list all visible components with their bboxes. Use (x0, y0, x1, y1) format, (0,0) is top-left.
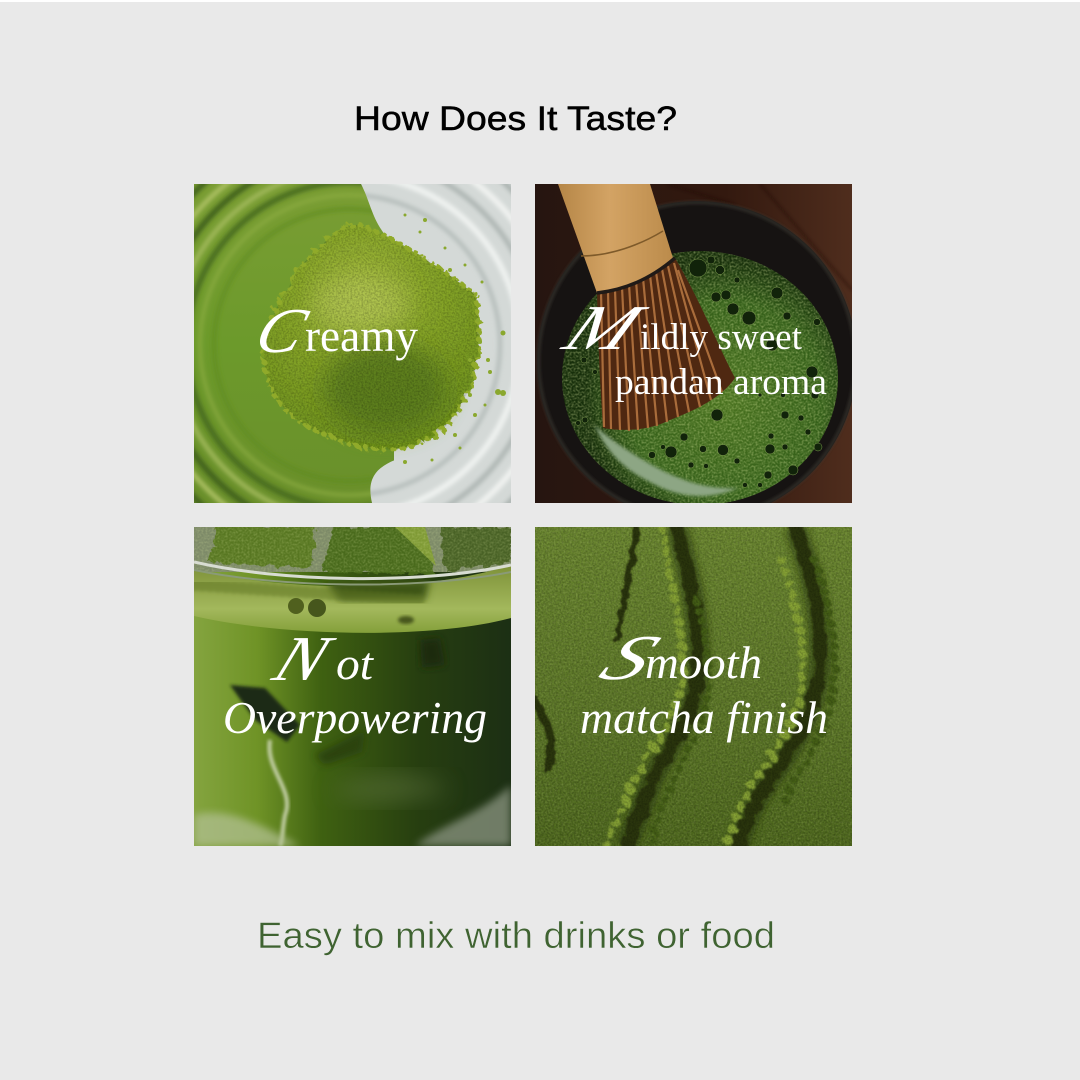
label: mildly sweet pandan aroma: pandan aroma (615, 362, 827, 403)
leaf (594, 425, 738, 496)
label: not overpowering (223, 624, 487, 743)
bubbles (576, 256, 822, 488)
label: mildly sweet pandan aroma (551, 292, 827, 403)
panel: smooth matcha finish (535, 527, 852, 846)
label: not overpowering: ot (336, 638, 374, 689)
label: smooth matcha finish: matcha finish (580, 692, 828, 743)
foam band (194, 565, 511, 633)
powder specks (403, 214, 506, 464)
label: smooth matcha finish (580, 622, 828, 743)
soft furrow shadows (627, 527, 820, 846)
powder clumps beside the furrows (604, 527, 682, 846)
label: creamy: C (247, 295, 317, 366)
label: not overpowering: N (263, 624, 343, 695)
bowl (537, 201, 857, 521)
furrows (535, 527, 834, 846)
panel: not overpowering (194, 526, 511, 846)
green matcha layer (194, 184, 394, 503)
label: mildly sweet pandan aroma: M (551, 292, 658, 364)
label: mildly sweet pandan aroma: ildly sweet (640, 317, 803, 358)
panel: creamy (194, 184, 511, 503)
footer text: Easy to mix with drinks or food (257, 915, 775, 956)
glass top with powder (194, 527, 511, 572)
whisk tines (597, 258, 735, 430)
rim (194, 562, 511, 579)
label: creamy: reamy (305, 310, 418, 361)
title: How Does It Taste? (354, 100, 677, 138)
label: not overpowering: Overpowering (223, 692, 487, 743)
shards (230, 685, 300, 742)
plate rings (366, 184, 511, 503)
label: smooth matcha finish: mooth (645, 637, 762, 688)
milk swirl (269, 740, 287, 846)
powder mound (264, 225, 479, 450)
label: smooth matcha finish: S (588, 622, 672, 693)
label: creamy (247, 295, 418, 366)
bubbles (288, 598, 304, 614)
panel: mildly sweet (535, 184, 857, 521)
whisk handle (558, 184, 673, 293)
